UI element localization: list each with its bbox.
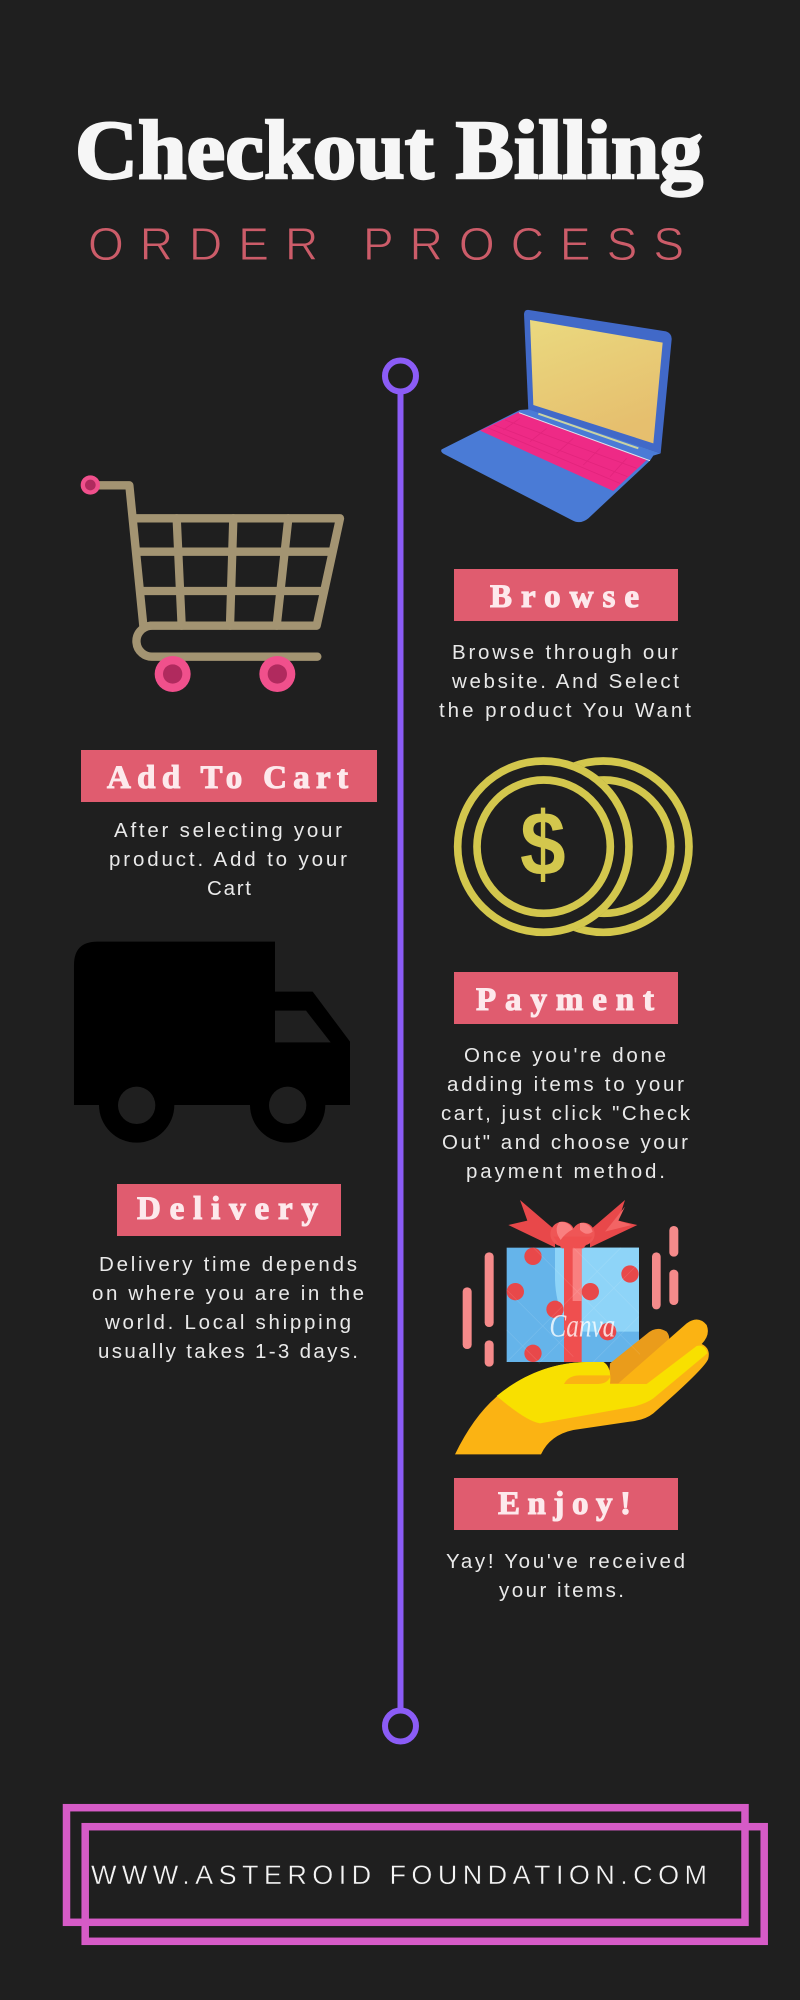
icon: coins bbox=[454, 757, 689, 936]
icon: shopping cart bbox=[81, 475, 340, 692]
label: add to cart bbox=[81, 750, 377, 802]
label: enjoy: Enjoy! bbox=[498, 1486, 631, 1522]
website url: WWW.ASTEROID FOUNDATION.COM bbox=[91, 1860, 707, 1890]
panel: add to cart bbox=[81, 475, 377, 900]
panel: website footer bbox=[66, 1808, 764, 1941]
title: Checkout Billing bbox=[75, 104, 703, 197]
text: delivery: usually takes 1-3 days. bbox=[98, 1340, 358, 1363]
timeline bbox=[385, 360, 416, 1742]
label: payment: Payment bbox=[476, 982, 654, 1018]
panel: delivery bbox=[74, 942, 364, 1363]
text: enjoy: Yay! You've received bbox=[446, 1550, 685, 1573]
frame: front bbox=[85, 1827, 764, 1941]
icon: laptop bbox=[441, 310, 672, 522]
label: delivery bbox=[117, 1184, 341, 1236]
text: payment: adding items to your bbox=[447, 1073, 684, 1096]
text: browse: website. And Select bbox=[451, 670, 679, 693]
label: browse: Browse bbox=[490, 579, 639, 615]
frame: back bbox=[66, 1808, 745, 1922]
label: delivery: Delivery bbox=[137, 1191, 318, 1227]
label: enjoy bbox=[454, 1478, 678, 1530]
text: add to cart bbox=[109, 819, 347, 900]
subtitle: ORDER PROCESS bbox=[88, 218, 684, 270]
text: delivery: Delivery time depends bbox=[99, 1253, 357, 1276]
text: browse: Browse through our bbox=[452, 641, 678, 664]
panel: enjoy bbox=[446, 1200, 709, 1602]
panel: payment bbox=[441, 757, 691, 1183]
text: payment: Out" and choose your bbox=[442, 1131, 688, 1154]
text: add to cart: Cart bbox=[207, 877, 251, 900]
text: delivery bbox=[92, 1253, 364, 1363]
text: browse: the product You Want bbox=[439, 699, 691, 722]
icon: coins: $ bbox=[520, 794, 566, 895]
text: add to cart: product. Add to your bbox=[109, 848, 347, 871]
label: add to cart: Add To Cart bbox=[107, 760, 348, 796]
text: payment: payment method. bbox=[466, 1160, 665, 1183]
text: payment: cart, just click "Check bbox=[441, 1102, 691, 1125]
text: delivery: on where you are in the bbox=[92, 1282, 364, 1305]
text: payment: Once you're done bbox=[464, 1044, 666, 1067]
text: enjoy bbox=[446, 1550, 685, 1602]
label: browse bbox=[454, 569, 678, 621]
icon: gift on hand: Canva bbox=[549, 1309, 615, 1345]
text: payment bbox=[441, 1044, 691, 1183]
text: enjoy: your items. bbox=[499, 1579, 624, 1602]
label: payment bbox=[454, 972, 678, 1024]
text: browse bbox=[439, 641, 691, 722]
text: delivery: world. Local shipping bbox=[104, 1311, 351, 1334]
icon: gift on hand bbox=[455, 1200, 709, 1454]
icon: truck bbox=[74, 942, 350, 1143]
panel: browse bbox=[439, 310, 691, 722]
text: add to cart: After selecting your bbox=[114, 819, 342, 842]
